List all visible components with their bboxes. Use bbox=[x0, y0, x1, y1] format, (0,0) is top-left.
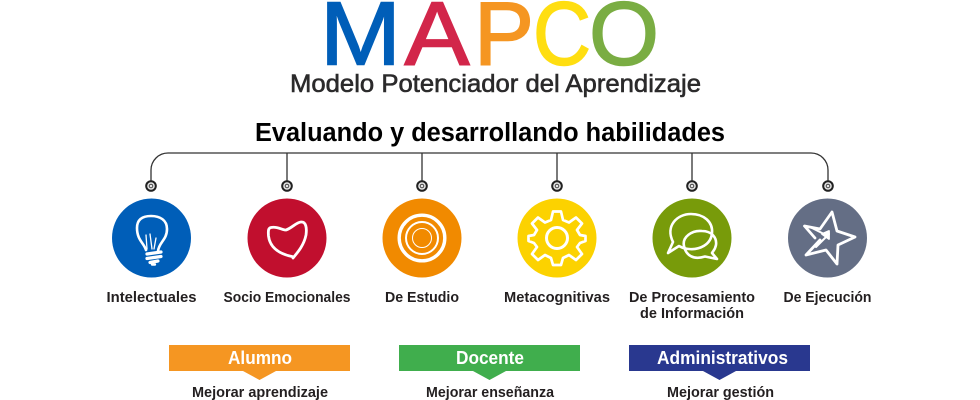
category labels: De Procesamiento bbox=[629, 290, 755, 306]
icon: light bulb bbox=[112, 198, 191, 278]
heading: Evaluando y desarrollando habilidades bbox=[255, 119, 725, 147]
subtitle: Modelo Potenciador del Aprendizaje bbox=[290, 70, 701, 98]
banner: Alumno bbox=[169, 345, 350, 400]
icon: gear bbox=[518, 198, 596, 278]
category labels: Metacognitivas bbox=[504, 290, 610, 306]
icon: speech bubbles bbox=[652, 198, 732, 278]
category labels: Socio Emocionales bbox=[224, 290, 350, 306]
icon: concentric circles bbox=[382, 198, 462, 278]
category labels: Intelectuales bbox=[106, 290, 196, 306]
banner: Docente bbox=[399, 345, 580, 400]
banner: Administrativos: Administrativos bbox=[657, 347, 788, 368]
banner: Alumno: Alumno bbox=[228, 347, 292, 368]
category labels: De Estudio bbox=[385, 290, 459, 306]
icon: star with arrow bbox=[788, 198, 867, 278]
category labels: De Ejecución bbox=[784, 290, 872, 306]
category labels bbox=[106, 290, 872, 322]
icon: heart bbox=[248, 198, 326, 278]
banner: Administrativos bbox=[629, 345, 810, 400]
connector tree bbox=[146, 153, 833, 191]
category labels: de Información bbox=[640, 306, 744, 322]
banner: Docente: Docente bbox=[456, 347, 524, 368]
logo: MAPCO bbox=[320, 0, 659, 84]
